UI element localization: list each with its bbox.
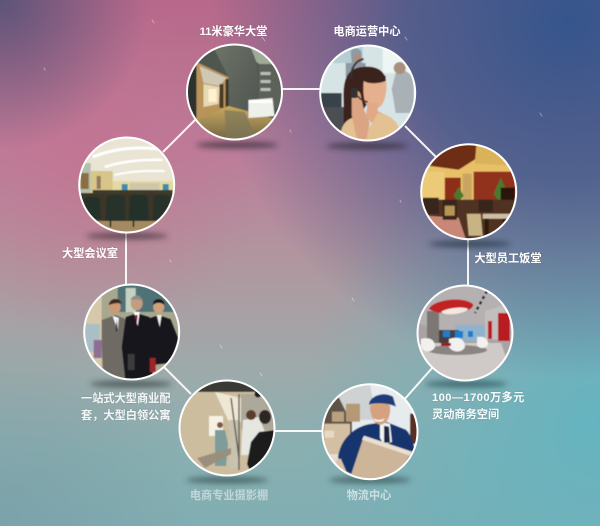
label: 电商运营中心: 电商运营中心 — [333, 24, 401, 38]
photo: meeting space — [415, 283, 515, 383]
photo: call centre agent — [318, 43, 418, 143]
photo: logistics courier — [320, 382, 420, 482]
label: 一站式大型商业配套 — [81, 391, 171, 422]
shadow: logistics — [329, 476, 411, 484]
label: 一站式大型商业配套: 套，大型白领公寓 — [81, 408, 171, 422]
label: 电商专业摄影棚: 电商专业摄影棚 — [190, 488, 268, 502]
shadow: call centre — [326, 142, 408, 150]
label: 100—1700万多元 灵动商务空间 — [432, 390, 525, 421]
shadow: business people — [90, 380, 172, 388]
label: 100—1700万多元 灵动商务空间: 灵动商务空间 — [432, 407, 499, 421]
shadow: studio — [186, 476, 268, 484]
photo: business people — [82, 282, 182, 383]
label: 大型会议室: 大型会议室 — [62, 246, 118, 260]
label: 物流中心: 物流中心 — [347, 488, 391, 502]
label: 11米豪华大堂: 11米豪华大堂 — [200, 24, 267, 38]
photo: lobby — [184, 42, 284, 142]
label: 100—1700万多元 灵动商务空间: 100—1700万多元 — [432, 390, 525, 404]
connector lines — [126, 89, 468, 431]
shadow: conference — [86, 232, 168, 240]
shadow: lobby — [196, 142, 278, 148]
photo: conference room — [77, 135, 177, 235]
label: 大型员工饭堂: 大型员工饭堂 — [474, 251, 542, 265]
shadow: office — [425, 380, 507, 388]
photo: restaurant — [419, 142, 519, 244]
shadow: restaurant — [429, 240, 511, 248]
label: 一站式大型商业配套: 一站式大型商业配 — [81, 391, 171, 405]
photo: photography studio — [177, 378, 277, 478]
